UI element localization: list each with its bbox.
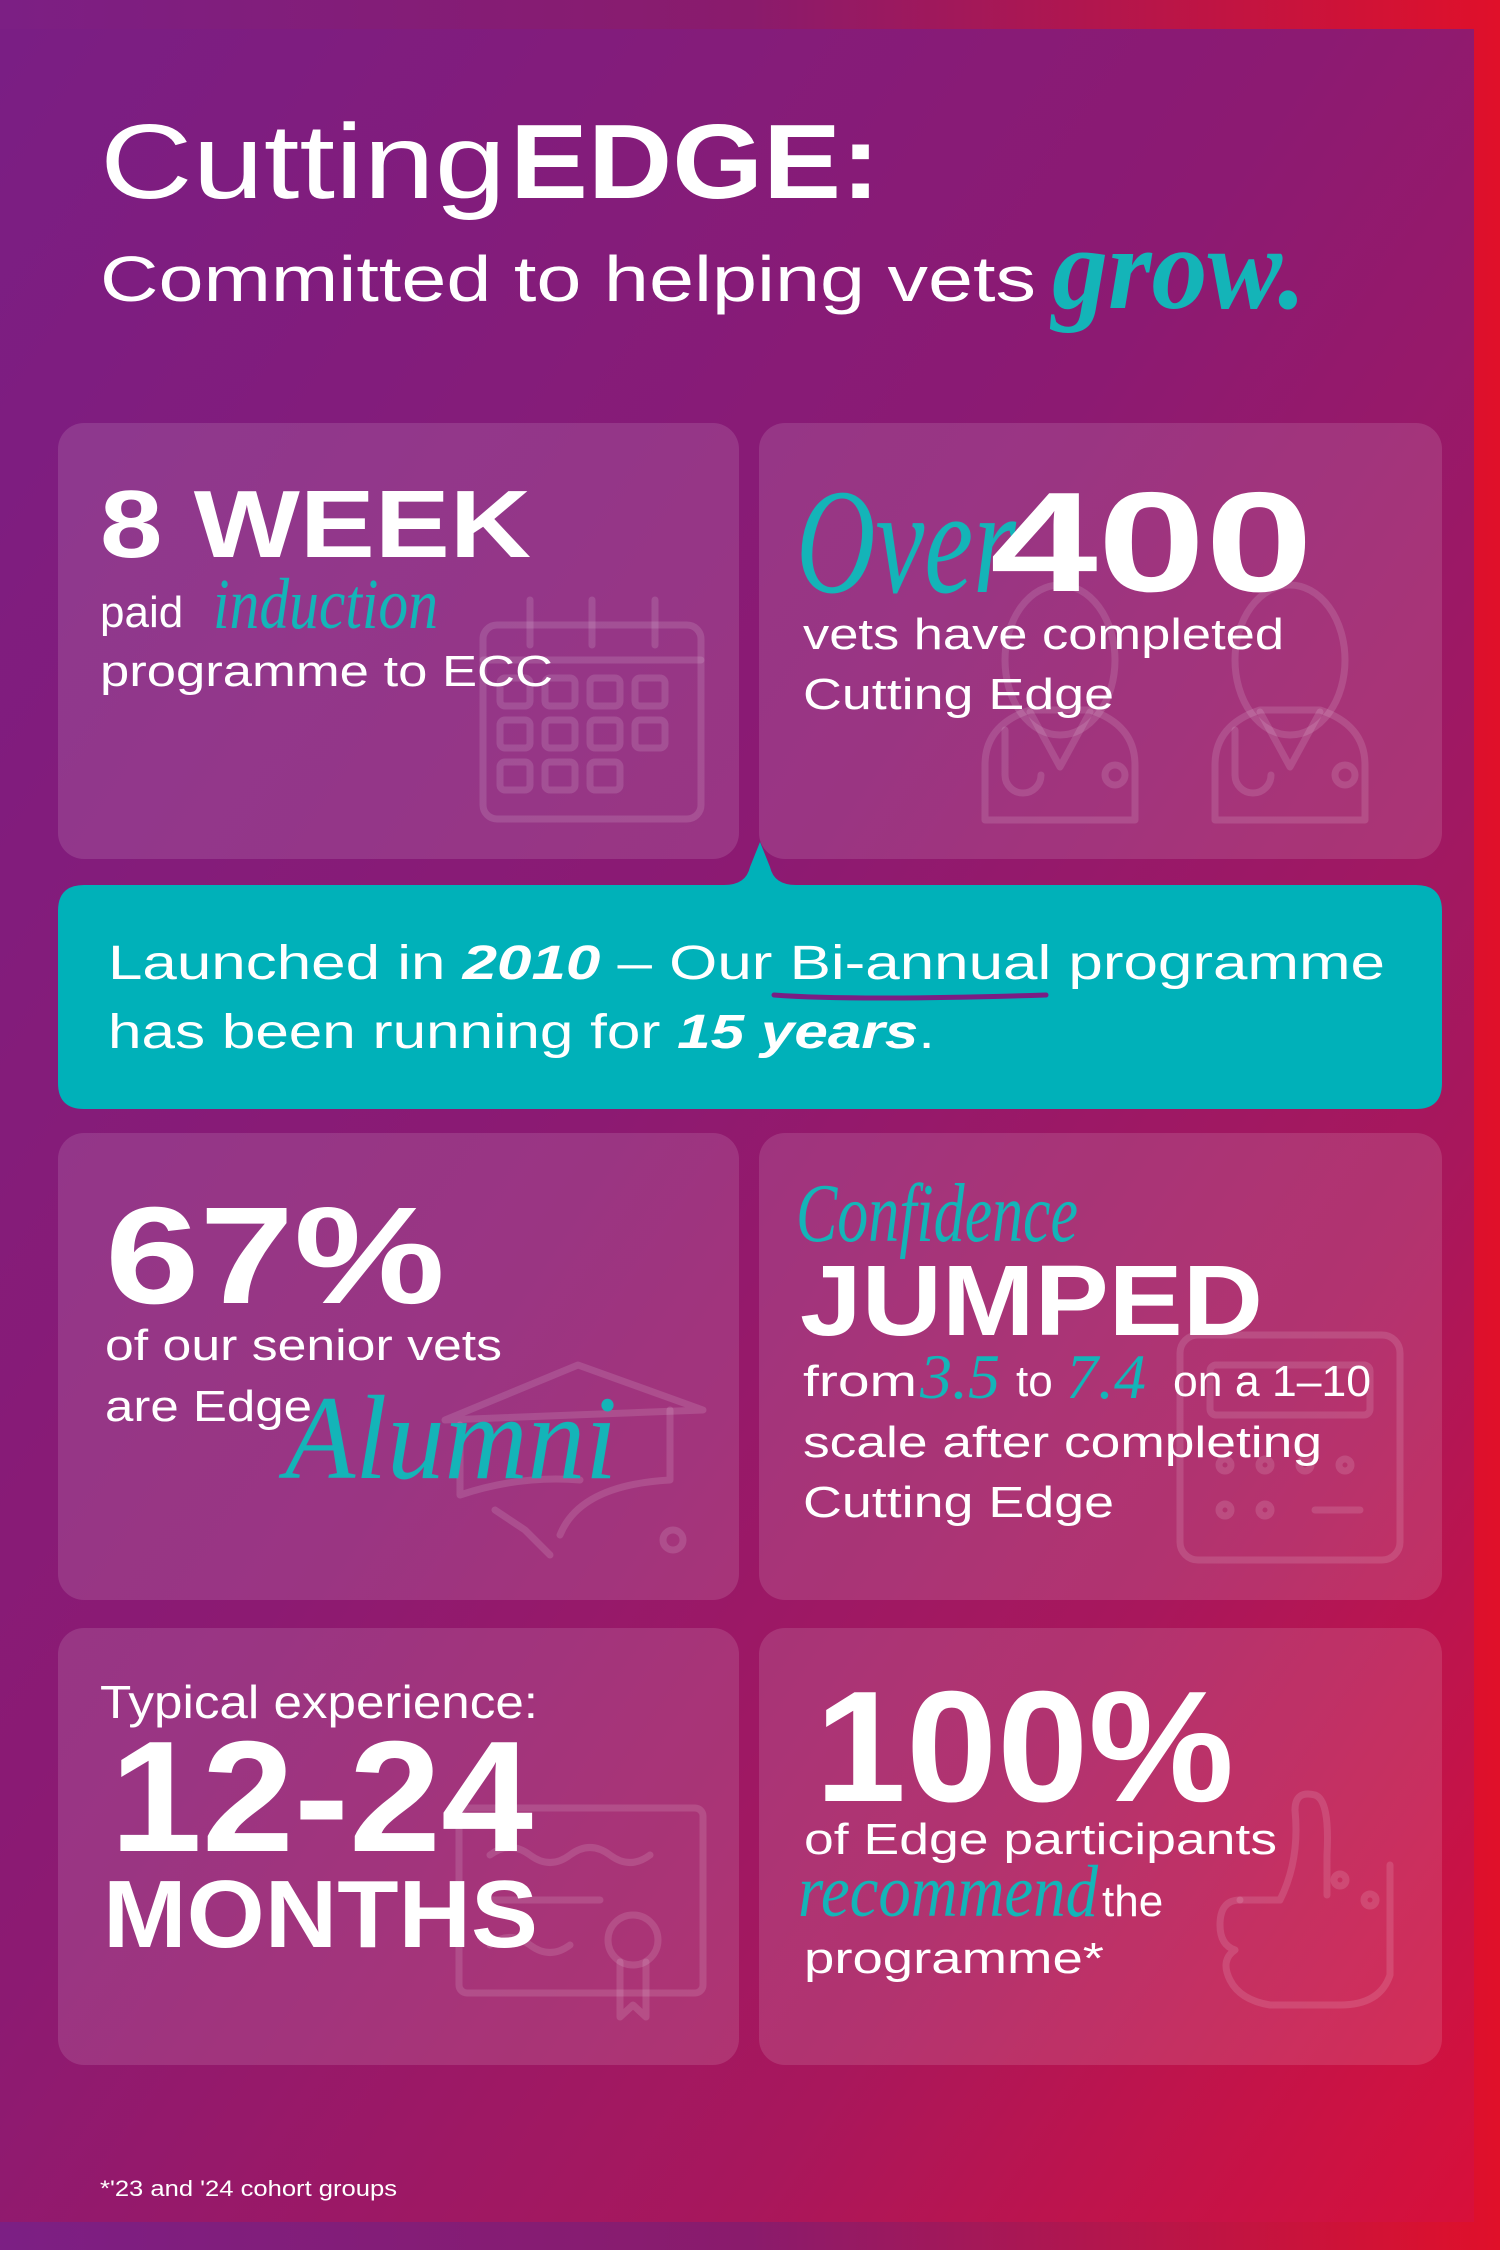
panel: 12-24 months: 12-24 [110,1709,533,1885]
panel: confidence jumped: Cutting Edge [803,1478,1114,1527]
panel: over 400: 400 [990,463,1313,622]
panel: over 400 [759,423,1442,859]
panel: over 400: Cutting Edge [803,670,1114,719]
title: Cutting [100,103,506,221]
panel: 100% recommend: programme* [804,1934,1104,1983]
panel: confidence jumped: 7.4 [1066,1341,1146,1412]
panel: 100% recommend: recommend [798,1851,1099,1933]
icon: graduation cap [445,1365,703,1555]
panel: confidence jumped: 3.5 [919,1341,1000,1412]
icon: thumbs up [1220,1794,1390,2005]
panel: over 400: vets have completed [803,610,1284,659]
subtitle: grow. [1049,203,1306,334]
panel: 67% alumni: are Edge [105,1382,312,1431]
stat: over 400: Over [796,459,1016,625]
panel: 8 week: induction [213,564,438,644]
stat: confidence jumped: Confidence [796,1167,1078,1260]
panel: confidence jumped: to [1016,1357,1053,1406]
panel: 67% alumni: of our senior vets [105,1321,502,1370]
panel: 12-24 months: MONTHS [103,1861,538,1968]
banner: launched 2010: Launched in 2010 – Our Bi-annual programme [108,937,1385,990]
panel: 100% recommend: the [1102,1877,1163,1926]
stat: 67%: 67% [105,1179,445,1333]
panel: confidence jumped: scale after completing [803,1418,1322,1467]
icon: certificate [459,1808,703,2017]
panel: 8 week: paid [100,588,183,637]
panel: 100% recommend [759,1628,1442,2065]
panel: 8 week [58,423,739,859]
banner: launched 2010 [58,842,1442,1109]
stat: 8 week: 8 WEEK [100,471,531,578]
panel: 100% recommend: of Edge participants [804,1815,1277,1864]
banner: launched 2010: has been running for 15 years . [108,1006,935,1059]
panel: confidence jumped [759,1133,1442,1600]
stat: 100%: 100% [815,1659,1234,1835]
footnote: *'23 and '24 cohort groups [100,2176,397,2201]
stat: 12-24 months: Typical experience: [100,1676,538,1728]
panel: confidence jumped: on a 1–10 [1173,1357,1371,1406]
panel: 12-24 months [58,1628,739,2065]
panel: 8 week: programme to ECC [100,647,553,696]
panel: confidence jumped: JUMPED [800,1245,1263,1357]
icon: calendar [483,600,701,819]
title: EDGE: [510,103,880,221]
panel: 67% alumni [58,1133,739,1600]
title [100,103,880,221]
icon: calculator [1180,1335,1400,1560]
panel: 67% alumni: Alumni [278,1371,617,1504]
icon: doctors [985,585,1365,820]
subtitle [100,203,1306,334]
subtitle: Committed to helping vets [100,243,1036,315]
panel: confidence jumped: from [803,1357,917,1406]
